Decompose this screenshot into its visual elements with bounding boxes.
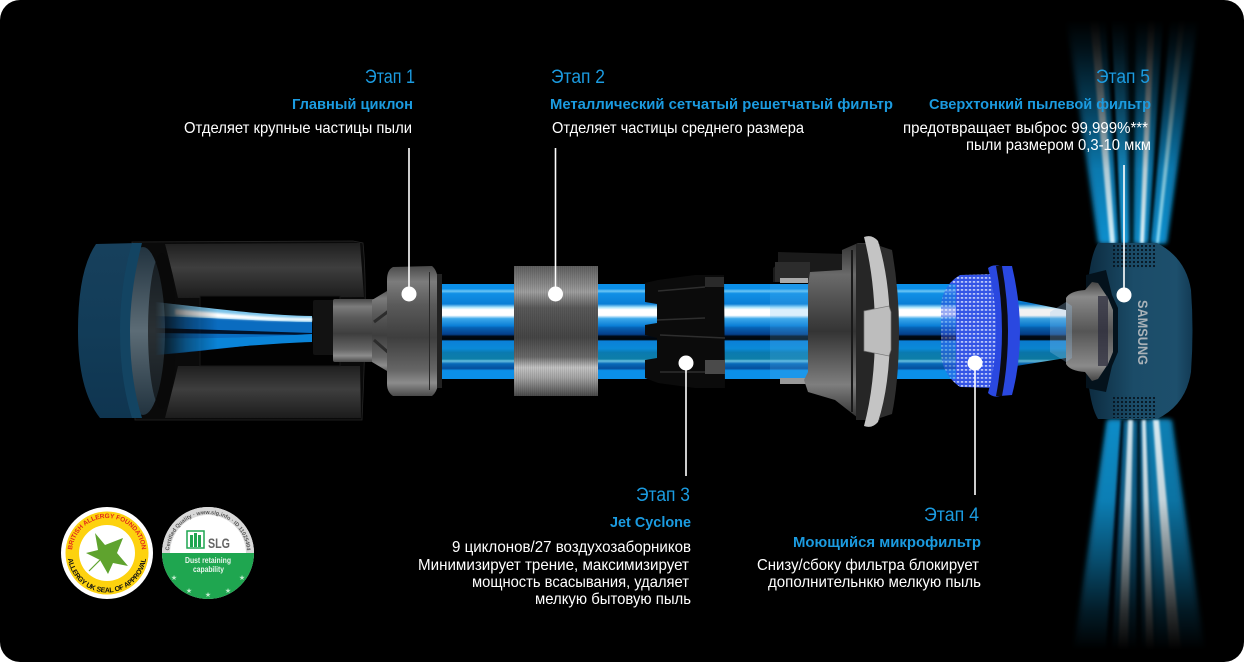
metal mesh filter: [514, 266, 598, 396]
text block: stage 3: 9 циклонов/27 воздухозаборников: [452, 539, 691, 556]
badge: British Allergy Foundation: ALLERGY UK SEAL OF APPROVAL: [68, 558, 146, 592]
housing body: [804, 243, 868, 420]
text block: stage 3: мелкую бытовую пыль: [535, 591, 691, 608]
text block: stage 2: Отделяет частицы среднего размера: [552, 120, 804, 137]
exhaust head: [1050, 243, 1192, 419]
text block: stage 5: Сверхтонкий пылевой фильтр: [929, 96, 1151, 113]
badge: SLG: SLG: [208, 535, 230, 551]
beam fade into mesh: [940, 284, 956, 379]
rating stars: ★: [239, 574, 245, 582]
text block: stage 3: мощность всасывания, удаляет: [472, 574, 690, 591]
rating stars: ★: [225, 587, 231, 595]
badge: SLG: capability: [193, 565, 224, 574]
text block: stage 1: [184, 67, 415, 137]
exhaust air rays: top: [1066, 20, 1198, 243]
air flow beams through the filter stages: [436, 284, 1066, 379]
motor housing: [773, 236, 899, 427]
marker: stage 4: [968, 356, 982, 495]
text block: stage 4: дополнительнкю мелкую пыль: [768, 574, 981, 591]
black seal: [996, 266, 1008, 396]
rating stars: ★: [186, 587, 192, 595]
badge: British Allergy Foundation: [61, 507, 153, 599]
marker: stage 3: [678, 356, 694, 476]
inner glass end: [121, 247, 165, 415]
text block: stage 1: Отделяет крупные частицы пыли: [184, 120, 412, 137]
bin body: [132, 241, 365, 420]
dark window behind the beam: [200, 296, 340, 366]
badge: SLG: [162, 507, 254, 599]
rating stars: ★: [205, 591, 211, 599]
rear bracket: [773, 252, 845, 282]
washable micro filter: [940, 265, 1020, 397]
blue flange: [988, 265, 1020, 397]
marker: stage 2: [548, 148, 563, 302]
bottom vents: [1113, 395, 1157, 418]
text block: stage 5: предотвращает выброс 99,999%***: [903, 120, 1148, 137]
cyclone ring: [387, 266, 438, 396]
badge: SLG: Certified Quality · www.slg.info · ID 11025404: [165, 510, 251, 550]
clip tab: [864, 306, 891, 356]
text block: stage 5: [903, 67, 1151, 154]
top vents: [1113, 245, 1157, 268]
light ring: [864, 236, 890, 427]
lower lobe: [165, 366, 361, 418]
text block: stage 4: Моющийся микрофильтр: [793, 534, 981, 551]
text block: stage 2: Этап 2: [551, 67, 605, 88]
text block: stage 5: пыли размером 0,3-10 мкм: [966, 137, 1151, 154]
text block: stage 5: Этап 5: [1096, 67, 1150, 88]
text block: stage 3: Этап 3: [636, 485, 690, 506]
blue lid: [78, 243, 140, 418]
head shell: [1086, 243, 1192, 419]
marker: stage 1: [402, 148, 416, 302]
badge: British Allergy Foundation: BRITISH ALLERGY FOUNDATION: [68, 514, 146, 550]
text block: stage 3: Jet Cyclone: [610, 514, 691, 531]
motor cone: [1066, 282, 1113, 381]
collar: [333, 299, 375, 362]
text block: stage 2: Металлический сетчатый решетчатый фильтр: [550, 96, 893, 113]
dot mesh: [941, 274, 998, 388]
main cyclone: [313, 266, 442, 396]
icon: SLG logo: [187, 531, 204, 548]
callout lines and markers: [402, 148, 1132, 495]
rating stars: [171, 574, 245, 599]
text block: stage 4: Снизу/сбоку фильтра блокирует: [757, 557, 980, 574]
text block: stage 4: Этап 4: [924, 505, 979, 526]
text block: stage 1: Главный циклон: [292, 96, 413, 113]
text block: stage 3: Минимизирует трение, максимизирует: [418, 557, 690, 574]
air beam in bin: [155, 302, 312, 355]
upper lobe: [165, 243, 364, 298]
cone fins: [372, 288, 392, 374]
badge: SLG: Dust retaining: [185, 556, 231, 565]
dark inner cavity: [1086, 270, 1118, 392]
blue glass end: [1050, 302, 1072, 362]
dust bin: [78, 241, 365, 420]
text block: stage 1: Этап 1: [365, 67, 415, 88]
neck: [313, 300, 335, 355]
text block: stage 2: [550, 67, 893, 137]
rear section: [880, 246, 899, 418]
text block: stage 3: [418, 485, 691, 608]
icon: green leaf: [86, 533, 128, 574]
samsung wordmark: SAMSUNG: [1135, 300, 1151, 365]
text block: stage 4: [757, 505, 981, 591]
rating stars: ★: [171, 574, 177, 582]
exhaust air rays: bottom: [1073, 420, 1205, 650]
marker: stage 5: [1116, 165, 1132, 302]
jet cyclone: [645, 275, 725, 388]
filter cone blue base: [941, 274, 998, 388]
